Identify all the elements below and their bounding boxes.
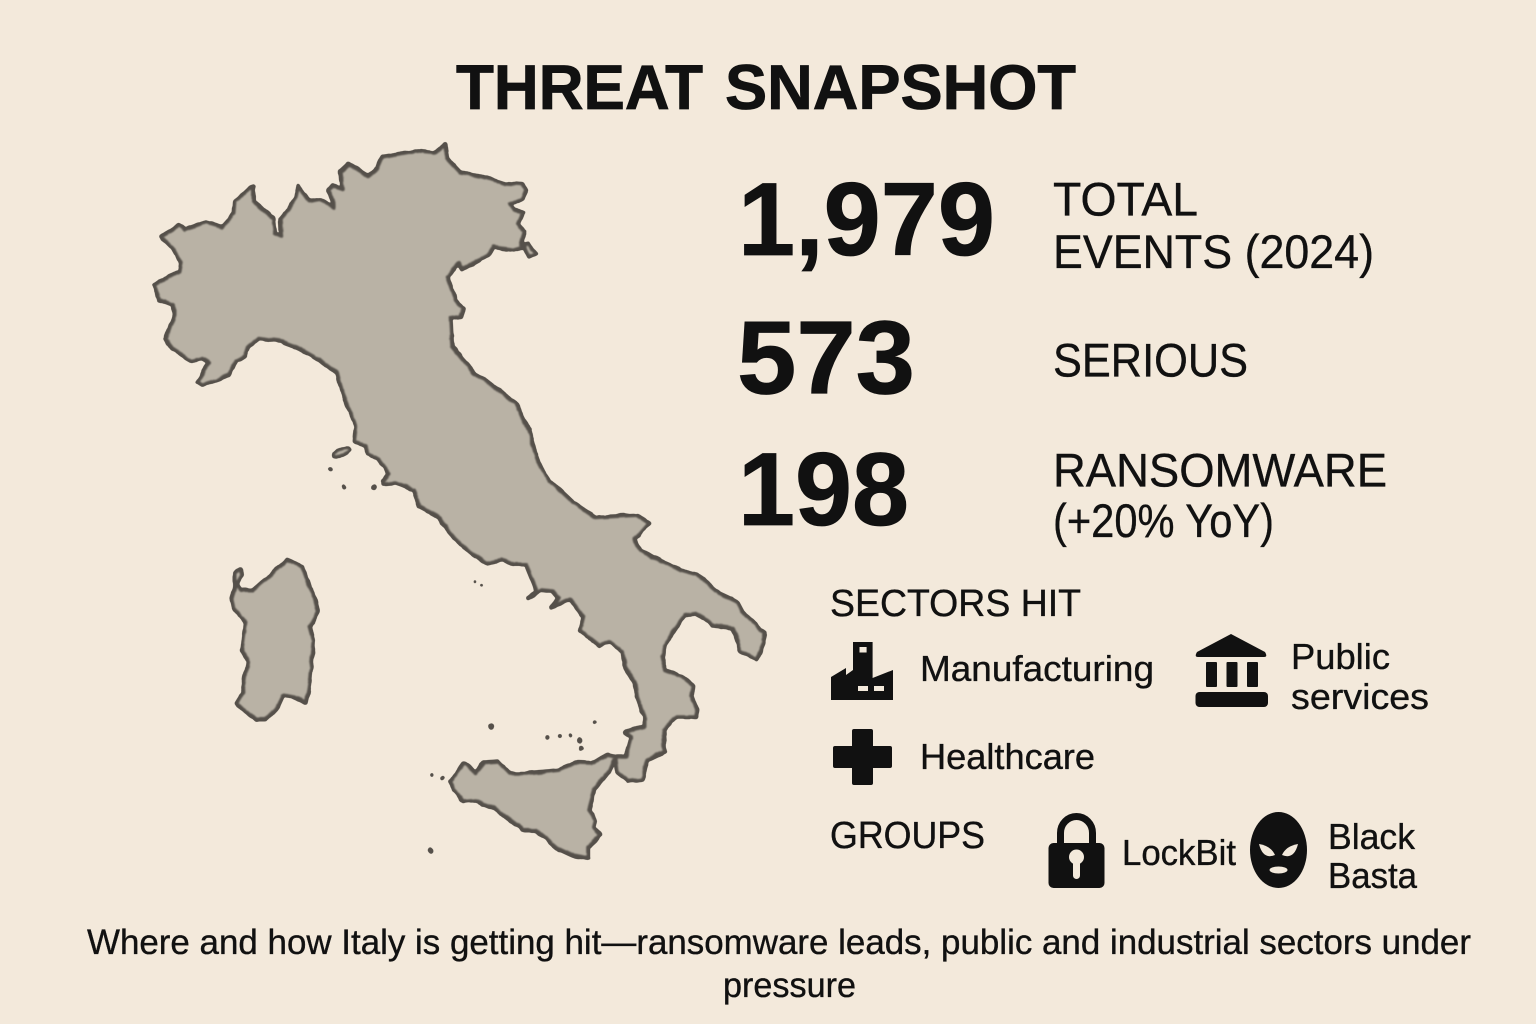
label total events [1053,172,1374,278]
label public services [1291,636,1429,717]
label black basta: Black [1328,816,1416,857]
map of Italy [154,144,764,858]
label total events: EVENTS (2024) [1053,225,1374,278]
label lockbit: LockBit [1122,832,1236,873]
icon: public building [1196,634,1268,707]
label public services: Public [1291,636,1390,677]
number 1,979: 1,979 [738,162,995,278]
label ransomware [1053,444,1387,547]
icon: medical cross [833,729,892,785]
label public services: services [1291,676,1429,717]
label total events: TOTAL [1053,172,1198,226]
icon: balaclava mask [1250,812,1307,888]
stat: ransomware [738,432,1387,548]
Sicily [451,755,615,858]
label black basta [1328,816,1418,896]
label ransomware: RANSOMWARE [1053,444,1387,496]
number 198: 198 [738,432,909,548]
icon: padlock [1048,817,1104,888]
panel: groups [830,812,1418,896]
groups heading: GROUPS [830,815,985,857]
footer caption [87,923,1471,1005]
footer caption: pressure [723,966,856,1005]
small islands [328,466,597,853]
title: THREAT [456,53,703,123]
label black basta: Basta [1328,855,1418,896]
Elba island [333,447,351,458]
icon: factory [831,642,893,700]
number 573: 573 [737,300,915,416]
Sardinia [232,560,318,720]
sectors heading: SECTORS HIT [830,583,1081,625]
label manufacturing: Manufacturing [920,648,1154,689]
footer caption: Where and how Italy is getting hit—ransomware leads, public and industrial sectors under [87,923,1471,962]
stat: total events [738,162,1374,278]
panel: sectors hit [830,583,1429,785]
title [456,53,1076,123]
stat: serious [737,300,1248,416]
label ransomware: (+20% YoY) [1053,494,1274,547]
mainland Italy [154,144,764,782]
title: SNAPSHOT [725,53,1076,123]
label healthcare: Healthcare [920,736,1095,777]
label serious: SERIOUS [1053,334,1248,386]
